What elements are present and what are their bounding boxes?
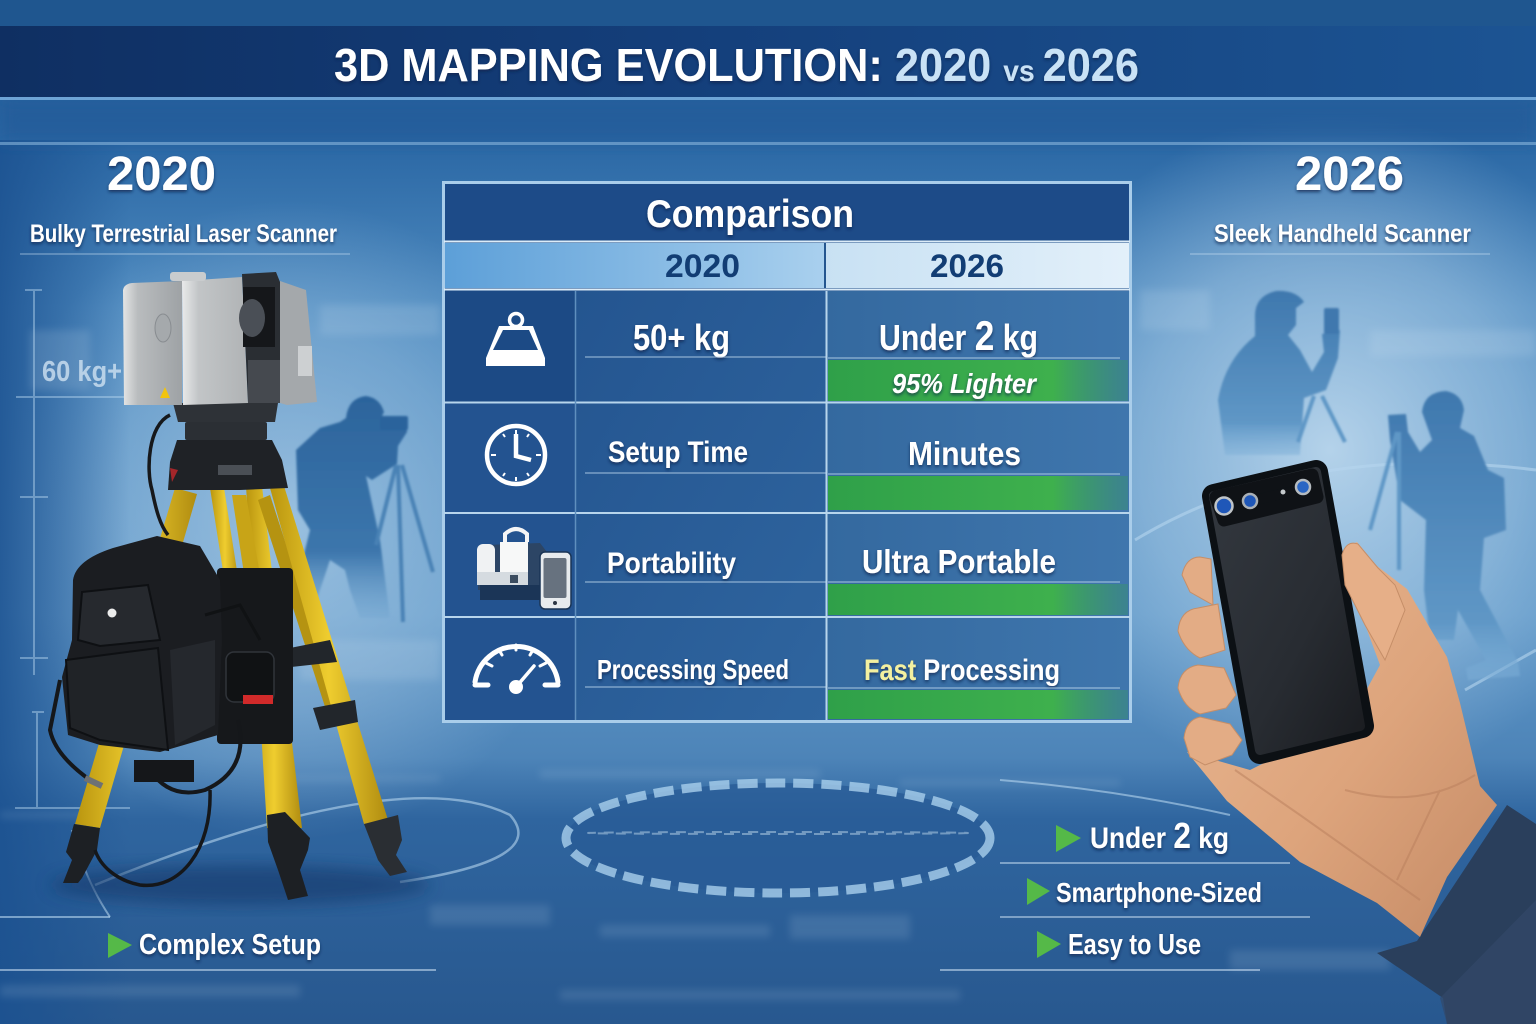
- benefit: weight: Under 2 kg: [1090, 815, 1229, 856]
- column headers: 2026: [930, 248, 1004, 284]
- column headers: [444, 243, 1130, 288]
- sleeve: [1377, 805, 1536, 1024]
- tripod straps: [280, 640, 358, 730]
- phone body: [1214, 472, 1362, 752]
- column headers: 2020: [665, 248, 740, 284]
- scanner cable: [149, 415, 170, 535]
- scale ruler with weight label: [15, 290, 130, 808]
- list: 2020 drawback: [0, 929, 436, 971]
- icon: clock: [487, 426, 545, 484]
- row: portability: Ultra Portable: [862, 543, 1056, 580]
- benefit: ease: Easy to Use: [1068, 929, 1201, 961]
- tripod legs: [63, 486, 407, 900]
- ground shadow: [50, 865, 430, 905]
- row: processing speed: [475, 645, 1128, 719]
- row: processing speed: Fast Processing: [864, 654, 1060, 687]
- row: processing speed: Processing Speed: [597, 654, 789, 685]
- title: 3D MAPPING EVOLUTION: 2020 vs 2026: [334, 39, 1139, 91]
- silhouette: surveyors 2026: [1218, 291, 1520, 680]
- icon: gauge: [475, 645, 558, 694]
- left column heading: 2020: [107, 148, 216, 201]
- row: weight: [486, 312, 1128, 401]
- panel: comparison table: [443, 182, 1131, 722]
- row backgrounds: [444, 291, 576, 403]
- middle finger: [1178, 604, 1225, 658]
- row: portability: [477, 529, 1128, 615]
- ring finger: [1178, 665, 1236, 714]
- row: weight: Under 2 kg: [879, 312, 1038, 359]
- list: 2026 benefits: [940, 815, 1310, 971]
- backpack: [50, 536, 293, 885]
- left column heading: Bulky Terrestrial Laser Scanner: [30, 220, 337, 248]
- list: 2020 drawback: Complex Setup: [139, 929, 321, 961]
- icon: hand holding phone scanner: [1178, 472, 1536, 1024]
- table heading: [444, 183, 1130, 241]
- scanner body: [173, 403, 278, 422]
- tripod head: [168, 440, 288, 490]
- right column heading: Sleek Handheld Scanner: [1214, 220, 1471, 248]
- thumb: [1342, 543, 1405, 660]
- benefit: size: Smartphone-Sized: [1056, 877, 1262, 908]
- row: setup time: Setup Time: [608, 436, 748, 469]
- silhouette: surveyor 2020: [295, 396, 433, 622]
- row: portability: Portability: [607, 547, 736, 580]
- row: setup time: Minutes: [908, 435, 1021, 472]
- benefit: ease: [1037, 929, 1201, 961]
- hand back and thumb: [1187, 542, 1497, 937]
- index finger: [1182, 557, 1213, 605]
- row: weight: 95% Lighter: [892, 368, 1038, 399]
- left column heading: [20, 148, 350, 255]
- right column heading: 2026: [1295, 148, 1404, 201]
- mapping ring: [566, 783, 990, 893]
- fingers: [1178, 543, 1405, 765]
- scale ruler with weight label: 60 kg+: [42, 356, 122, 388]
- table heading: Comparison: [646, 193, 854, 236]
- little finger: [1184, 717, 1242, 765]
- icon: terrestrial laser scanner on tripod with backpack: [50, 272, 430, 905]
- icon: weight: [486, 314, 545, 366]
- row: setup time: [487, 426, 1128, 510]
- right column heading: [1190, 148, 1490, 255]
- tripod feet: [63, 824, 100, 883]
- title bar: [0, 0, 1536, 145]
- table grid lines: [444, 182, 1130, 722]
- row: weight: 50+ kg: [633, 317, 730, 358]
- icon: case and phone: [477, 529, 571, 609]
